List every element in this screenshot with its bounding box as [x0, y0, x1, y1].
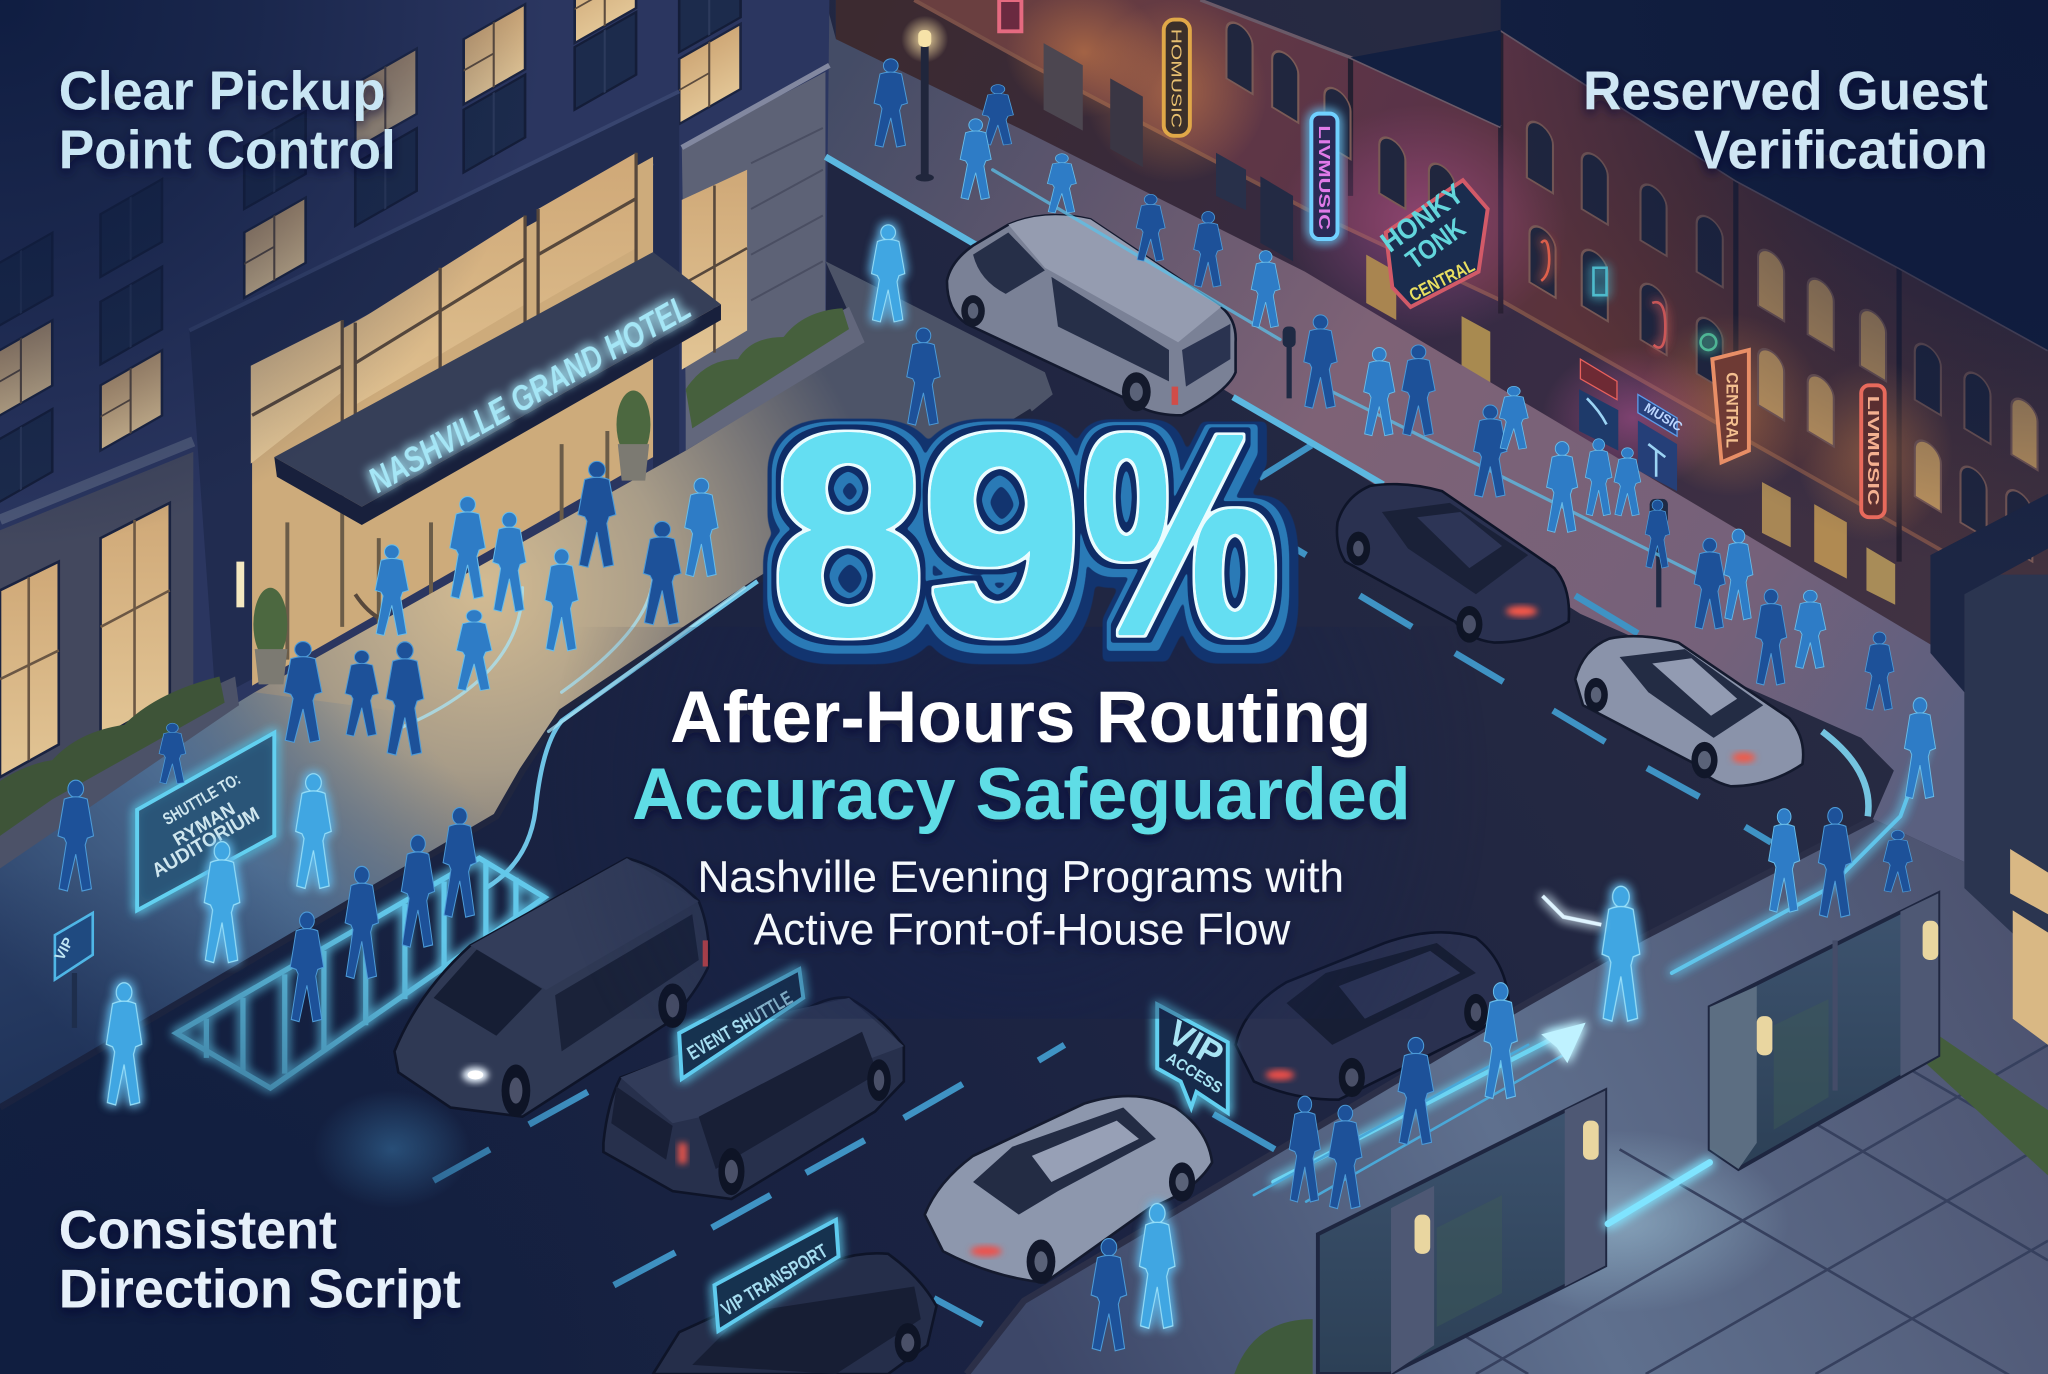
car: VIP transport van	[653, 1253, 936, 1374]
ground floor large windows	[0, 503, 170, 777]
people: mid-blue guests	[375, 119, 1936, 1099]
neon sign: home music	[1164, 20, 1190, 136]
sign: VIP access speech bubble: VIP	[1161, 1013, 1230, 1075]
tower windows	[0, 0, 741, 507]
stone side wall	[682, 65, 829, 392]
label: consistent direction script	[59, 1199, 461, 1319]
heading: accuracy safeguarded: Accuracy Safeguarded	[632, 754, 1411, 835]
staff wand	[1543, 896, 1601, 925]
light trails on walkways	[392, 170, 1927, 1224]
awning with hotel name: NASHVILLE GRAND HOTEL	[362, 288, 697, 501]
car: silver sedan right	[1575, 636, 1803, 786]
storefront neon boards: MUSIC	[1642, 400, 1686, 435]
neon sign: live music blue: LIVMUSIC	[1315, 125, 1332, 230]
panel: shuttle direction sign: RYMAN	[169, 798, 238, 850]
panel: hotel building	[0, 0, 829, 849]
heading: after-hours routing: After-Hours Routing	[670, 677, 1371, 758]
panel: shuttle direction sign: AUDITORIUM	[148, 803, 263, 882]
entrance portal frame	[189, 91, 679, 699]
sign: VIP access speech bubble: ACCESS	[1163, 1050, 1225, 1097]
car: event shuttle van	[603, 997, 904, 1199]
neon sign: Honky Tonk Central: HONKY	[1375, 178, 1470, 259]
arrow: walkway direction	[1541, 1023, 1586, 1063]
headline statistic: 89%: 8	[772, 374, 925, 694]
label: clear pickup point control	[59, 60, 396, 180]
lane markings	[434, 157, 1868, 1324]
sign: event shuttle	[679, 969, 803, 1079]
subheading: Active Front-of-House Flow	[754, 905, 1291, 954]
sign: VIP access post	[52, 913, 93, 1028]
label: clear pickup point control: Clear Pickup	[59, 60, 385, 122]
lower left sidewalk tint	[0, 692, 549, 1108]
label: reserved guest verification: Verification	[1694, 118, 1988, 180]
curb edge	[0, 411, 1032, 1108]
neon sign: central orange: CENTRAL	[1723, 372, 1742, 448]
curb route line	[486, 581, 758, 888]
headline statistic: 89%: %	[1083, 374, 1279, 694]
neon wall glows	[1006, 0, 1953, 542]
upper arched windows	[1226, 17, 2038, 562]
car: large passenger van	[394, 858, 709, 1117]
label: reserved guest verification: Reserved Guest	[1583, 60, 1988, 122]
car: dark sedan upper	[1337, 484, 1569, 643]
neon sign: central orange	[1712, 350, 1749, 462]
right street sidewalk	[825, 0, 1964, 862]
headlight beam on road	[313, 1091, 470, 1208]
panel: glass wall near plaza	[1710, 893, 1938, 1169]
neon window accents	[1541, 241, 1716, 350]
hotel forecourt sidewalk	[0, 261, 1053, 1108]
car: silver sedan lower	[925, 1096, 1212, 1284]
parking meter	[1283, 327, 1668, 607]
label: clear pickup point control: Point Control	[59, 118, 396, 180]
neon sign: Honky Tonk Central: CENTRAL	[1406, 255, 1478, 305]
panel: top-right rooftop shadow	[1351, 0, 2048, 350]
stone base wall	[0, 452, 193, 823]
neon sign: home music: HOMUSIC	[1168, 29, 1184, 128]
panel: glass wall lower	[1234, 1091, 1605, 1374]
people: glowing staff	[106, 225, 1640, 1328]
lobby glazing	[236, 153, 747, 686]
street lamp	[901, 16, 948, 182]
planters and hedges	[0, 307, 865, 869]
storefront glass	[1044, 43, 1895, 605]
panel: lower right plaza	[967, 810, 2048, 1374]
subheading: Nashville Evening Programs with	[697, 853, 1344, 902]
sign: event shuttle: EVENT SHUTTLE	[684, 987, 797, 1065]
neon sign: Honky Tonk Central	[1375, 178, 1488, 307]
panel: shuttle direction sign	[137, 733, 274, 910]
panel: right street brick buildings	[836, 0, 2048, 731]
car: dark sedan lower right	[1236, 932, 1509, 1100]
neon sign: live music blue	[1311, 114, 1337, 239]
neon sign: live music red	[1861, 385, 1885, 517]
label: consistent direction script: Consistent	[59, 1199, 337, 1261]
panel: right corner building	[1920, 494, 2048, 1175]
pickup hatch zone	[176, 858, 545, 1088]
car: silver van top	[947, 215, 1236, 415]
headline statistic: 89%: 9	[922, 374, 1081, 694]
center contrast backdrop	[549, 627, 1489, 1019]
storefront neon boards	[1580, 359, 1686, 436]
neon signs	[999, 0, 1885, 517]
awning with hotel name	[274, 252, 721, 525]
sign: VIP transport: VIP TRANSPORT	[717, 1240, 832, 1321]
panel: shuttle direction sign: SHUTTLE TO:	[160, 769, 244, 829]
neon sign: Honky Tonk Central: TONK	[1400, 212, 1471, 275]
neon sign: live music red: LIVMUSIC	[1864, 396, 1881, 505]
label: reserved guest verification	[1583, 60, 1988, 180]
label: consistent direction script: Direction Script	[59, 1257, 461, 1319]
sign: VIP access speech bubble	[1157, 1004, 1230, 1113]
subheading	[697, 853, 1344, 954]
sign: VIP access post: VIP	[52, 935, 77, 963]
neon sign: top pink	[999, 0, 1021, 31]
